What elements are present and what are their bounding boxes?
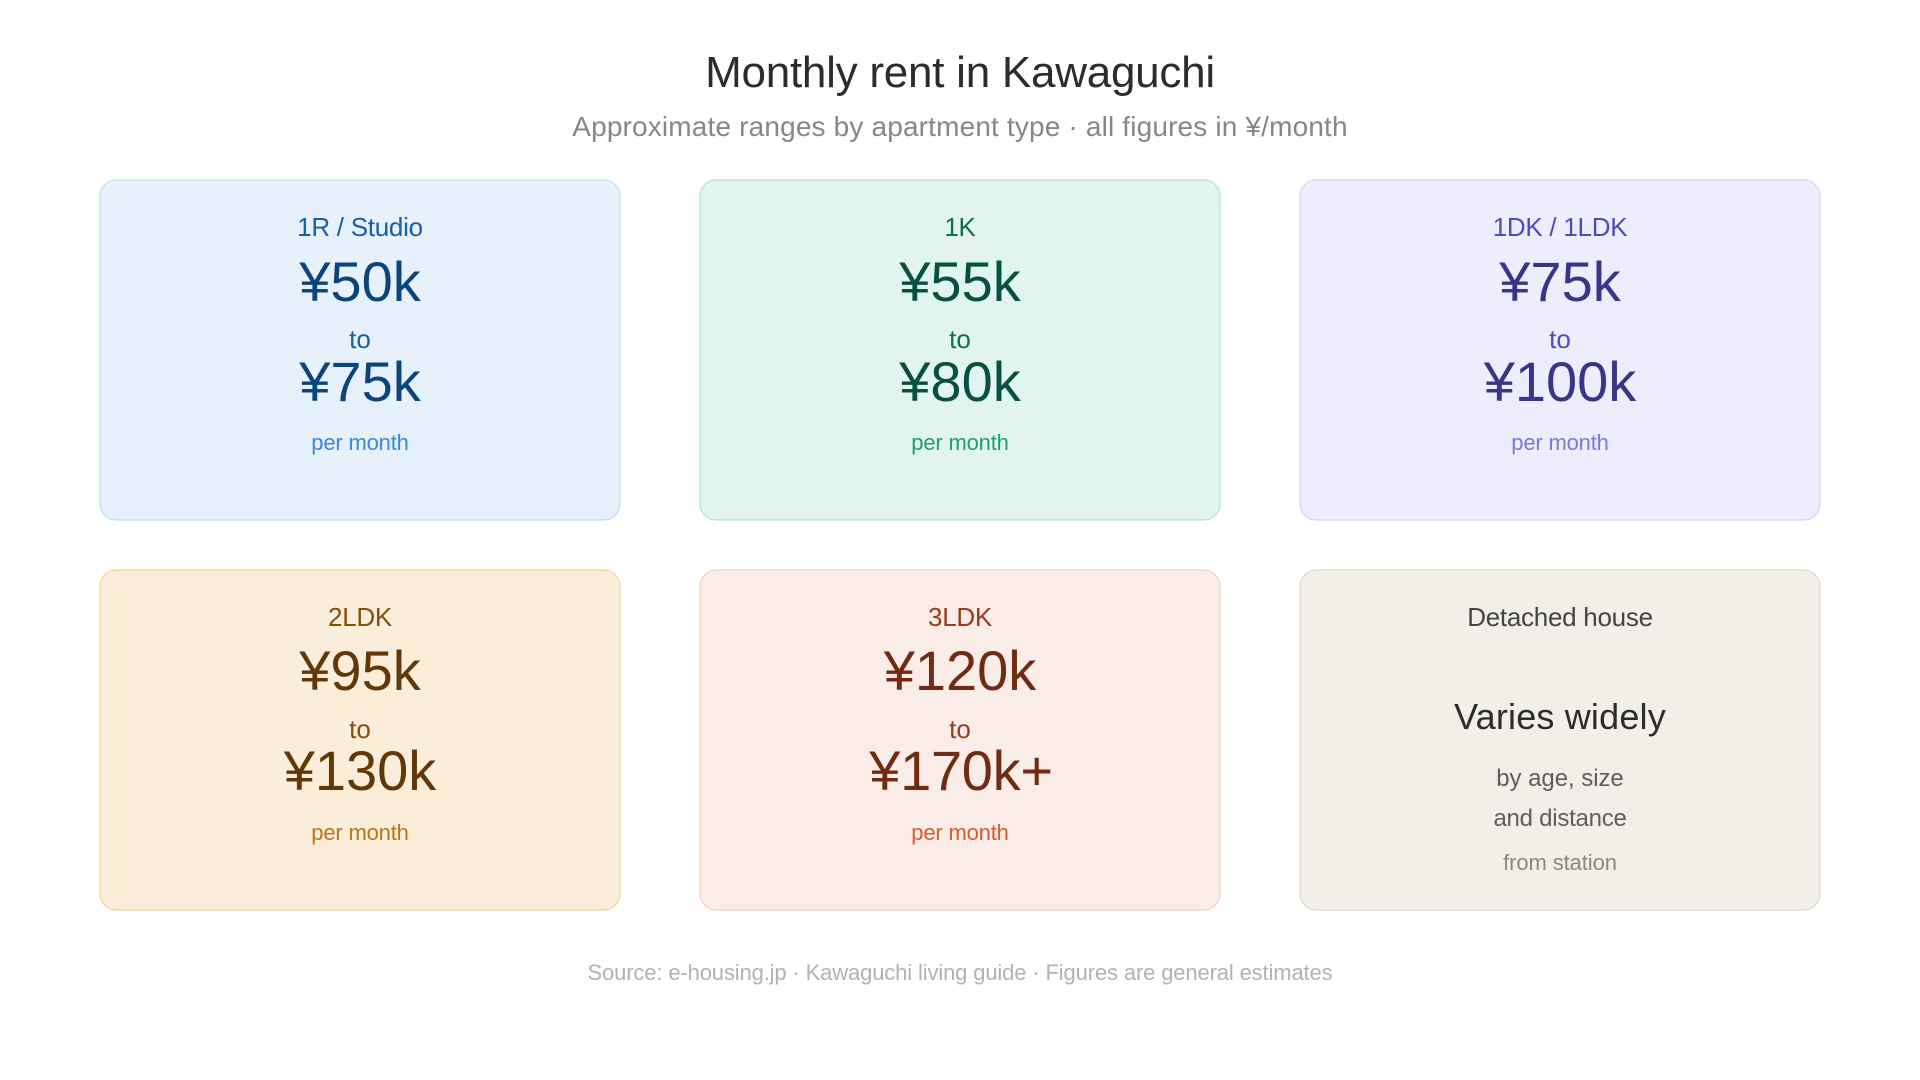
panel: 3LDK: ¥120k [884,639,1036,702]
panel: 1DK / 1LDK: ¥75k [1499,250,1621,313]
panel: Detached house: from station [1503,850,1617,875]
panel: 3LDK: ¥170k+ [869,739,1053,802]
panel: 2LDK: to [349,714,371,744]
title: Monthly rent in Kawaguchi [705,48,1215,97]
panel: 1K: ¥80k [899,350,1021,413]
panel: 1R / Studio: per month [311,430,409,455]
panel: 2LDK: per month [311,820,409,845]
panel: 1K: to [949,324,971,354]
panel: 1R / Studio: to [349,324,371,354]
panel: Detached house [1300,570,1820,910]
panel: 3LDK: per month [911,820,1009,845]
panel: 2LDK: 2LDK [328,602,392,632]
subtitle: Approximate ranges by apartment type · all figures in ¥/month [572,111,1348,142]
panel: 1K: 1K [944,212,976,242]
panel: 1DK / 1LDK: per month [1511,430,1609,455]
panel: 1R / Studio: ¥75k [299,350,421,413]
source note: Source: e-housing.jp · Kawaguchi living guide · Figures are general estimates [588,960,1332,985]
panel: 1DK / 1LDK: to [1549,324,1571,354]
panel: Detached house: by age, size [1496,765,1624,792]
panel: 1K: per month [911,430,1009,455]
panel: Detached house: Detached house [1467,602,1653,632]
panel: 3LDK: 3LDK [928,602,992,632]
panel: 1DK / 1LDK: ¥100k [1484,350,1636,413]
panel: 2LDK: ¥130k [284,739,436,802]
panel: 3LDK [700,570,1220,910]
panel: 1DK / 1LDK: 1DK / 1LDK [1493,212,1627,242]
panel: 2LDK: ¥95k [299,639,421,702]
panel: Detached house: Varies widely [1454,696,1666,737]
panel: Detached house: and distance [1493,805,1627,832]
panel: 1DK / 1LDK [1300,180,1820,520]
panel: 1R / Studio [100,180,620,520]
panel: 3LDK: to [949,714,971,744]
panel: 1K [700,180,1220,520]
panel: 1K: ¥55k [899,250,1021,313]
panel: 2LDK [100,570,620,910]
panel: 1R / Studio: 1R / Studio [297,212,423,242]
panel: 1R / Studio: ¥50k [299,250,421,313]
